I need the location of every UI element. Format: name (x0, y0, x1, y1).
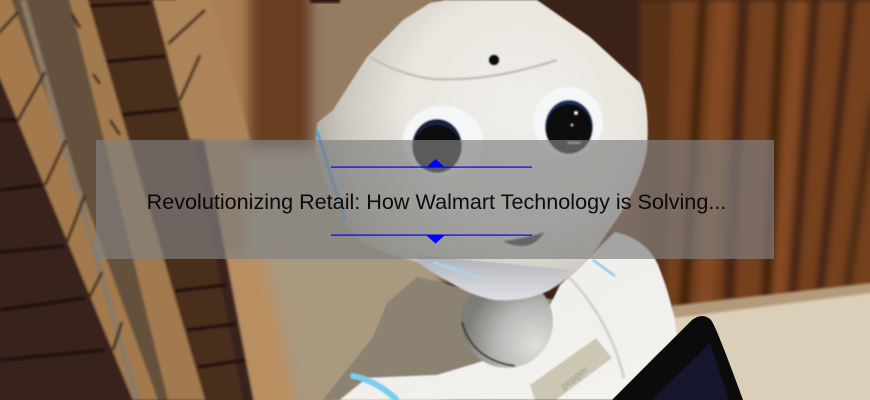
wood panel wall right (550, 0, 870, 325)
blue light left side of head (317, 131, 345, 220)
chin shading (417, 255, 570, 300)
shoulder shadow (323, 277, 560, 400)
tablet (612, 316, 743, 400)
name plate (530, 338, 612, 400)
robot (315, 0, 743, 400)
head (315, 0, 648, 300)
body panel seam (568, 276, 624, 378)
blue light on shoulder (353, 376, 396, 399)
camera dot (488, 54, 500, 66)
right eye (533, 87, 603, 157)
tan tile strips (0, 0, 158, 400)
bottom ornament: line with down triangle (331, 234, 532, 244)
body (323, 232, 677, 400)
lit body (340, 232, 677, 400)
blue light at lower head (433, 262, 480, 277)
tan and brown wall behind robot (150, 0, 445, 400)
body: pepper (559, 364, 591, 392)
neck sphere (461, 276, 553, 368)
translucent title panel (96, 140, 774, 259)
dark spot at top of wall (310, 0, 340, 3)
top ornament: line with up triangle (331, 159, 532, 168)
shelves and tiled column left (0, 0, 255, 400)
title text: Revolutionizing Retail: How Walmart Technology is Solving... (147, 189, 726, 214)
beige floor and edge right (660, 282, 870, 400)
forehead seam (370, 57, 557, 79)
left eye (403, 106, 483, 176)
mouth (503, 232, 545, 246)
blue light at right neck (593, 260, 615, 276)
